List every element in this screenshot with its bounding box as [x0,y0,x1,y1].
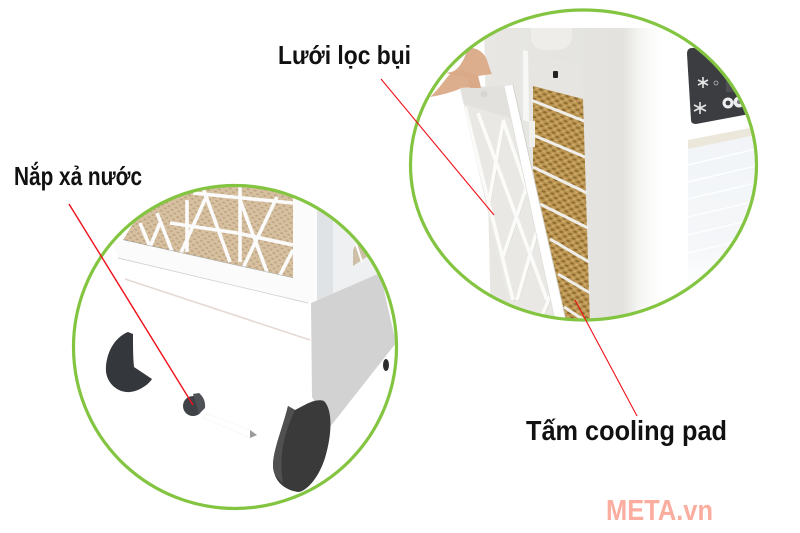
panel: left circle, drain plug and wheels [74,180,396,508]
right wheel [273,400,330,492]
top handle notch [540,28,572,50]
label: cooling pad: Tấm cooling pad [526,415,727,446]
watermark: META.vn [606,495,713,527]
circle outline [74,186,396,508]
rear wheel [383,359,389,371]
screw hole [553,71,558,78]
filter recess [523,50,583,122]
filter lattice [464,106,558,314]
control icons [694,77,708,114]
filter frame edge [504,85,567,325]
side of base [311,273,396,427]
fingers on filter [446,70,481,88]
control panel [687,48,746,124]
base seam [125,279,310,340]
drain plug [183,393,205,416]
leader line: dust filter [381,79,494,215]
label: dust filter: Lưới lọc bụi [278,40,411,70]
cooler body [484,28,646,318]
side grille [353,244,367,266]
drain pipe [204,413,257,438]
upper base band [123,240,293,278]
air filter mesh [460,85,567,326]
front grille [123,180,293,278]
filter clip [529,121,535,147]
leader line: cooling pad [575,300,637,416]
grille lattice [140,185,293,275]
label: drain cap: Nắp xả nước [14,161,142,191]
leader line: drain plug [69,204,193,405]
circle outline [410,10,756,320]
left wheel [106,332,152,392]
upper side panel [317,210,333,300]
cooling pad [533,86,590,325]
hand [430,48,492,97]
panel: right circle, filter and cooling pad [410,10,760,326]
pad slats [531,100,590,324]
louvers [688,128,755,256]
